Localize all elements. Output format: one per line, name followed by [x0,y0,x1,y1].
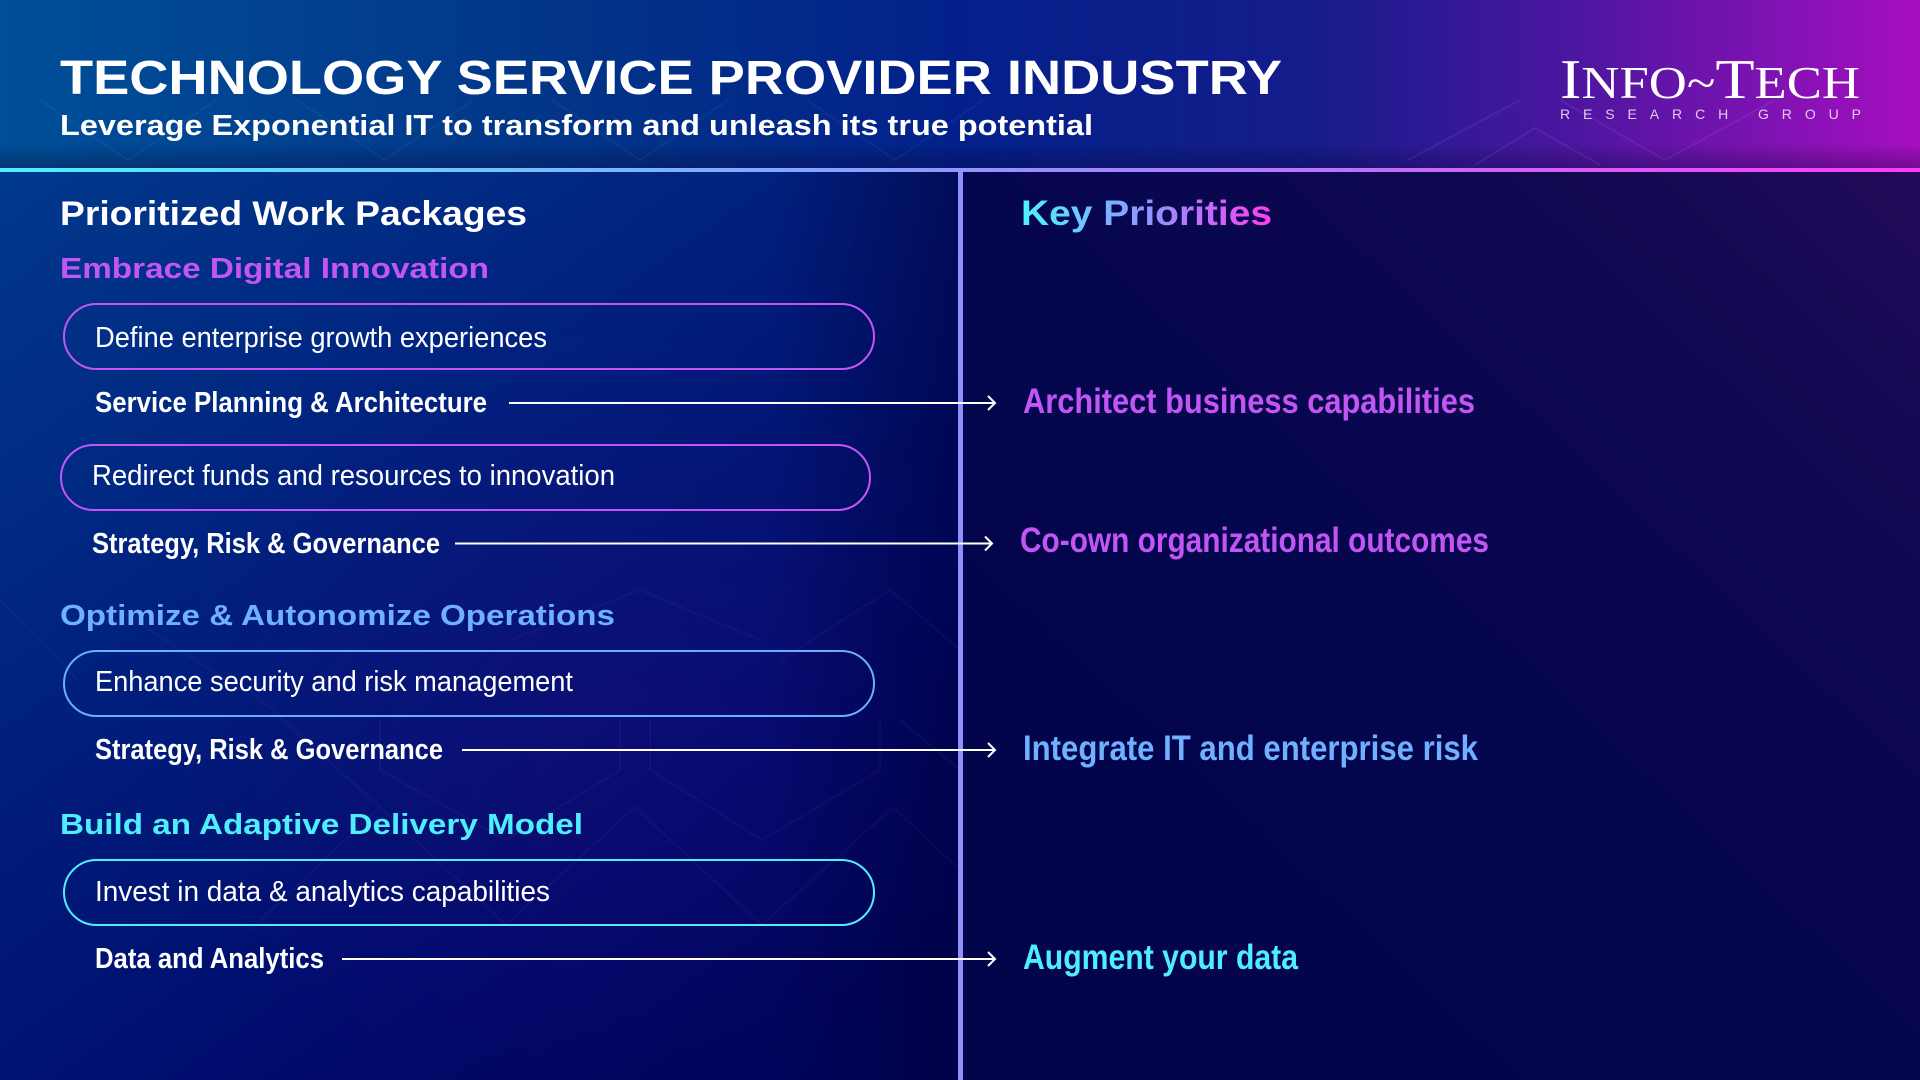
logo: Info-Tech Research Group: RESEARCH GROUP [1560,106,1861,122]
logo: Info-Tech Research Group: INFO ~TECH [1560,49,1860,111]
pill: define enterprise growth experiences [64,304,874,369]
work package row: service planning and architecture [95,387,995,419]
work package row: strategy, risk and governance: Strategy, Risk & Governance [95,734,443,766]
pill: redirect funds and resources: Redirect funds and resources to innovation [92,460,615,492]
work package row: strategy, risk and governance [92,528,992,560]
header banner [0,0,1920,168]
work package row: strategy, risk and governance [95,734,995,766]
heading: build an adaptive delivery model: Build an Adaptive Delivery Model [60,809,583,841]
pill: define enterprise growth experiences: Define enterprise growth experiences [95,322,547,354]
header divider line [0,168,1920,172]
pill: enhance security and risk management: Enhance security and risk management [95,666,573,698]
panel: prioritized work packages [60,195,995,975]
priority: architect business capabilities: Architect business capabilities [1023,382,1475,421]
priority: augment your data: Augment your data [1023,938,1298,977]
work package row: service planning and architecture: Service Planning & Architecture [95,387,487,419]
panel: key priorities [1020,194,1489,977]
work package row: data and analytics: Data and Analytics [95,943,324,975]
pill: enhance security and risk management [64,651,874,716]
work package row: data and analytics [95,943,995,975]
pill: invest in data and analytics capabilities: Invest in data & analytics capabilities [95,876,550,908]
decorative hexagon lines [0,590,960,930]
work package row: strategy, risk and governance: Strategy, Risk & Governance [92,528,440,560]
vertical divider [958,172,963,1080]
subtitle: Leverage Exponential IT to transform and unleash its true potential [60,110,1093,142]
pill: redirect funds and resources [61,445,870,510]
title: TECHNOLOGY SERVICE PROVIDER INDUSTRY [60,52,1282,105]
priority: co-own organizational outcomes: Co-own organizational outcomes [1020,521,1489,560]
heading: key priorities: Key Priorities [1021,194,1272,233]
heading: prioritized work packages: Prioritized Work Packages [60,195,527,233]
pill: invest in data and analytics capabilities [64,860,874,925]
heading: embrace digital innovation: Embrace Digital Innovation [60,253,489,285]
priority: integrate IT and enterprise risk: Integrate IT and enterprise risk [1023,729,1478,768]
heading: optimize and autonomize operations: Optimize & Autonomize Operations [60,600,615,632]
